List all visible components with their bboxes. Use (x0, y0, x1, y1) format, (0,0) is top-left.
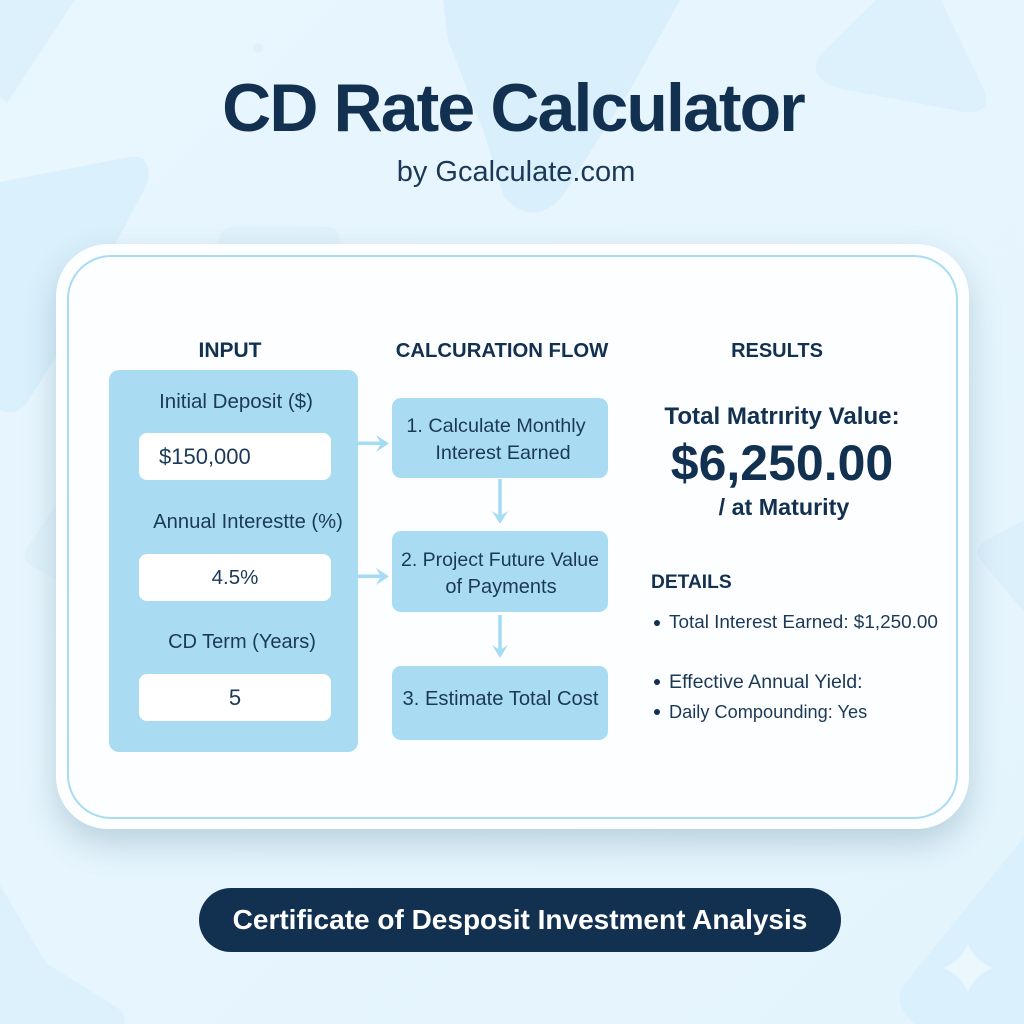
heading: input: INPUT (198, 339, 262, 362)
step 2: 2. Project Future Value (401, 549, 599, 571)
label: annual interest: Annual Interestte (%) (153, 511, 343, 533)
arrow: step 2 to step 3 (492, 615, 508, 658)
result note: / at Maturity (719, 494, 849, 520)
field: term (139, 674, 331, 721)
step 3: 3. Estimate Total Cost (402, 688, 598, 710)
footer pill (199, 888, 841, 952)
field: term: 5 (229, 685, 241, 710)
label: cd term: CD Term (Years) (168, 631, 316, 653)
heading: results: RESULTS (731, 340, 823, 362)
heading: details: DETAILS (651, 572, 732, 593)
step 1: 1. Calculate Monthly (406, 415, 586, 437)
result label: Total Matrırity Value: (664, 403, 900, 430)
title: CD Rate Calculator (222, 70, 804, 146)
field: deposit (139, 433, 331, 480)
footer pill: Certificate of Desposit Investment Analysis (233, 904, 807, 935)
arrow: step 1 to step 2 (492, 479, 508, 524)
step 1: Interest Earned (435, 442, 571, 464)
field: rate (139, 554, 331, 601)
panel: calculator card (56, 244, 969, 829)
step 2: of Payments (445, 576, 557, 598)
step 1 (392, 398, 608, 478)
result value: $6,250.00 (671, 435, 893, 491)
detail 2: Effective Annual Yield: (669, 671, 863, 693)
step 2 (392, 531, 608, 612)
icon: sparkle star (944, 944, 992, 992)
arrow: deposit to step 1 (358, 435, 389, 452)
detail 1: Total Interest Earned: $1,250.00 (669, 612, 938, 633)
label: initial deposit: Initial Deposit ($) (159, 390, 313, 413)
detail 3: Daily Compounding: Yes (669, 702, 867, 722)
subtitle: by Gcalculate.com (397, 156, 635, 188)
heading: calculation flow: CALCURATION FLOW (396, 340, 608, 362)
field: rate: 4.5% (212, 566, 258, 589)
step 3 (392, 666, 608, 740)
arrow: rate to step 2 (358, 568, 389, 585)
field: deposit: $150,000 (159, 444, 251, 469)
panel: input (109, 370, 358, 752)
